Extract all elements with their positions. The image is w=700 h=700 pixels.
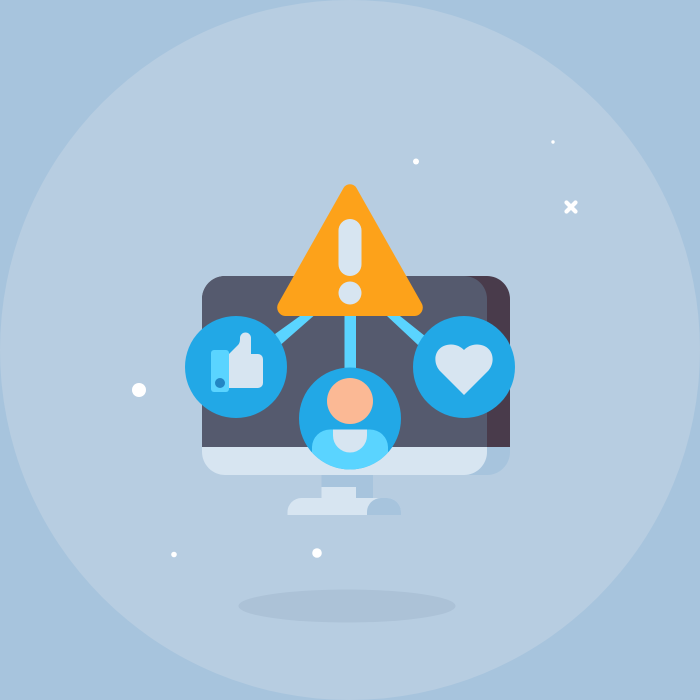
icon: heart bbox=[435, 344, 493, 395]
warning triangle bbox=[277, 184, 423, 316]
user badge bbox=[299, 368, 401, 470]
ground shadow bbox=[238, 590, 456, 622]
sparkle dots bbox=[132, 140, 555, 558]
like badge bbox=[185, 316, 287, 418]
connector lines bbox=[275, 310, 425, 372]
user head bbox=[327, 378, 373, 424]
monitor bbox=[202, 276, 510, 475]
monitor stand bbox=[288, 475, 401, 515]
heart badge bbox=[413, 316, 515, 418]
exclamation mark bbox=[338, 219, 362, 304]
sparkle cross bbox=[566, 202, 576, 212]
user body bbox=[312, 429, 388, 470]
icon: thumbs up bbox=[211, 332, 263, 392]
